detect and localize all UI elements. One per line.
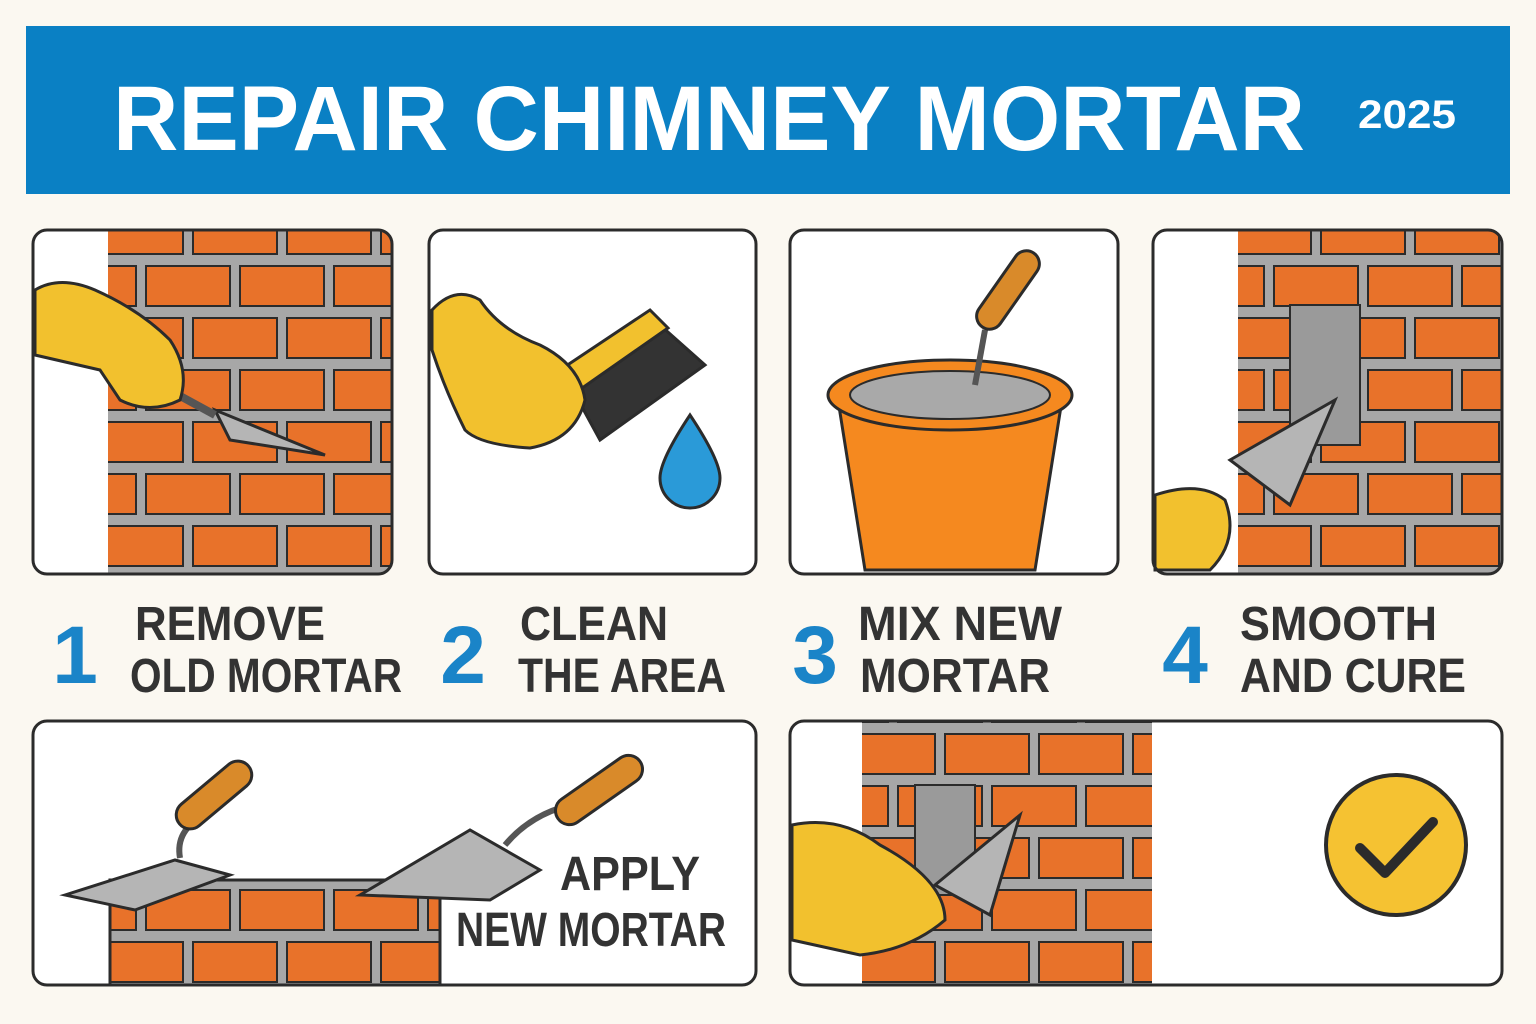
title banner: [26, 26, 1510, 194]
step 2 label: [440, 598, 726, 703]
title banner: REPAIR CHIMNEY MORTAR: [113, 68, 1305, 170]
icon: left trowel: [65, 755, 257, 910]
step 1 label: [52, 598, 402, 703]
text: apply new mortar: NEW MORTAR: [456, 904, 726, 957]
panel: clean the area: [429, 230, 756, 574]
step 3 label: MIX NEW: [858, 598, 1063, 651]
step 2 label: 2: [440, 610, 486, 701]
step 1 label: OLD MORTAR: [130, 650, 402, 703]
panel: mix new mortar: [790, 230, 1118, 574]
step 4 label: SMOOTH: [1240, 598, 1437, 651]
text: apply new mortar: APPLY: [560, 848, 700, 901]
step 1 label: REMOVE: [135, 598, 325, 651]
step 4 label: 4: [1162, 610, 1208, 701]
icon: bucket with mortar: [828, 360, 1072, 570]
icon: gloved hand with trowel: [35, 282, 325, 455]
step 2 label: THE AREA: [518, 650, 726, 703]
step 1 label: 1: [52, 610, 98, 701]
icon: water drop: [660, 415, 720, 508]
step 3 label: [792, 598, 1063, 703]
icon: wire brush: [545, 310, 705, 440]
text: apply new mortar: [456, 848, 726, 957]
panel: apply new mortar: [33, 721, 756, 990]
icon: trowel and hand: [1155, 400, 1335, 570]
title banner: 2025: [1358, 93, 1456, 137]
step 3 label: 3: [792, 610, 838, 701]
icon: trowel handle: [972, 246, 1044, 385]
panel: finished chimney: [790, 721, 1502, 985]
panel: smooth and cure: [1153, 230, 1508, 574]
step 3 label: MORTAR: [860, 650, 1050, 703]
step 2 label: CLEAN: [520, 598, 668, 651]
step 4 label: AND CURE: [1240, 650, 1466, 703]
icon: trowel and hand: [792, 815, 1020, 955]
step 4 label: [1162, 598, 1466, 703]
icon: gloved hand: [432, 294, 585, 448]
icon: right trowel: [360, 750, 648, 900]
icon: check mark circle: [1326, 775, 1466, 915]
panel: remove old mortar: [33, 230, 398, 574]
